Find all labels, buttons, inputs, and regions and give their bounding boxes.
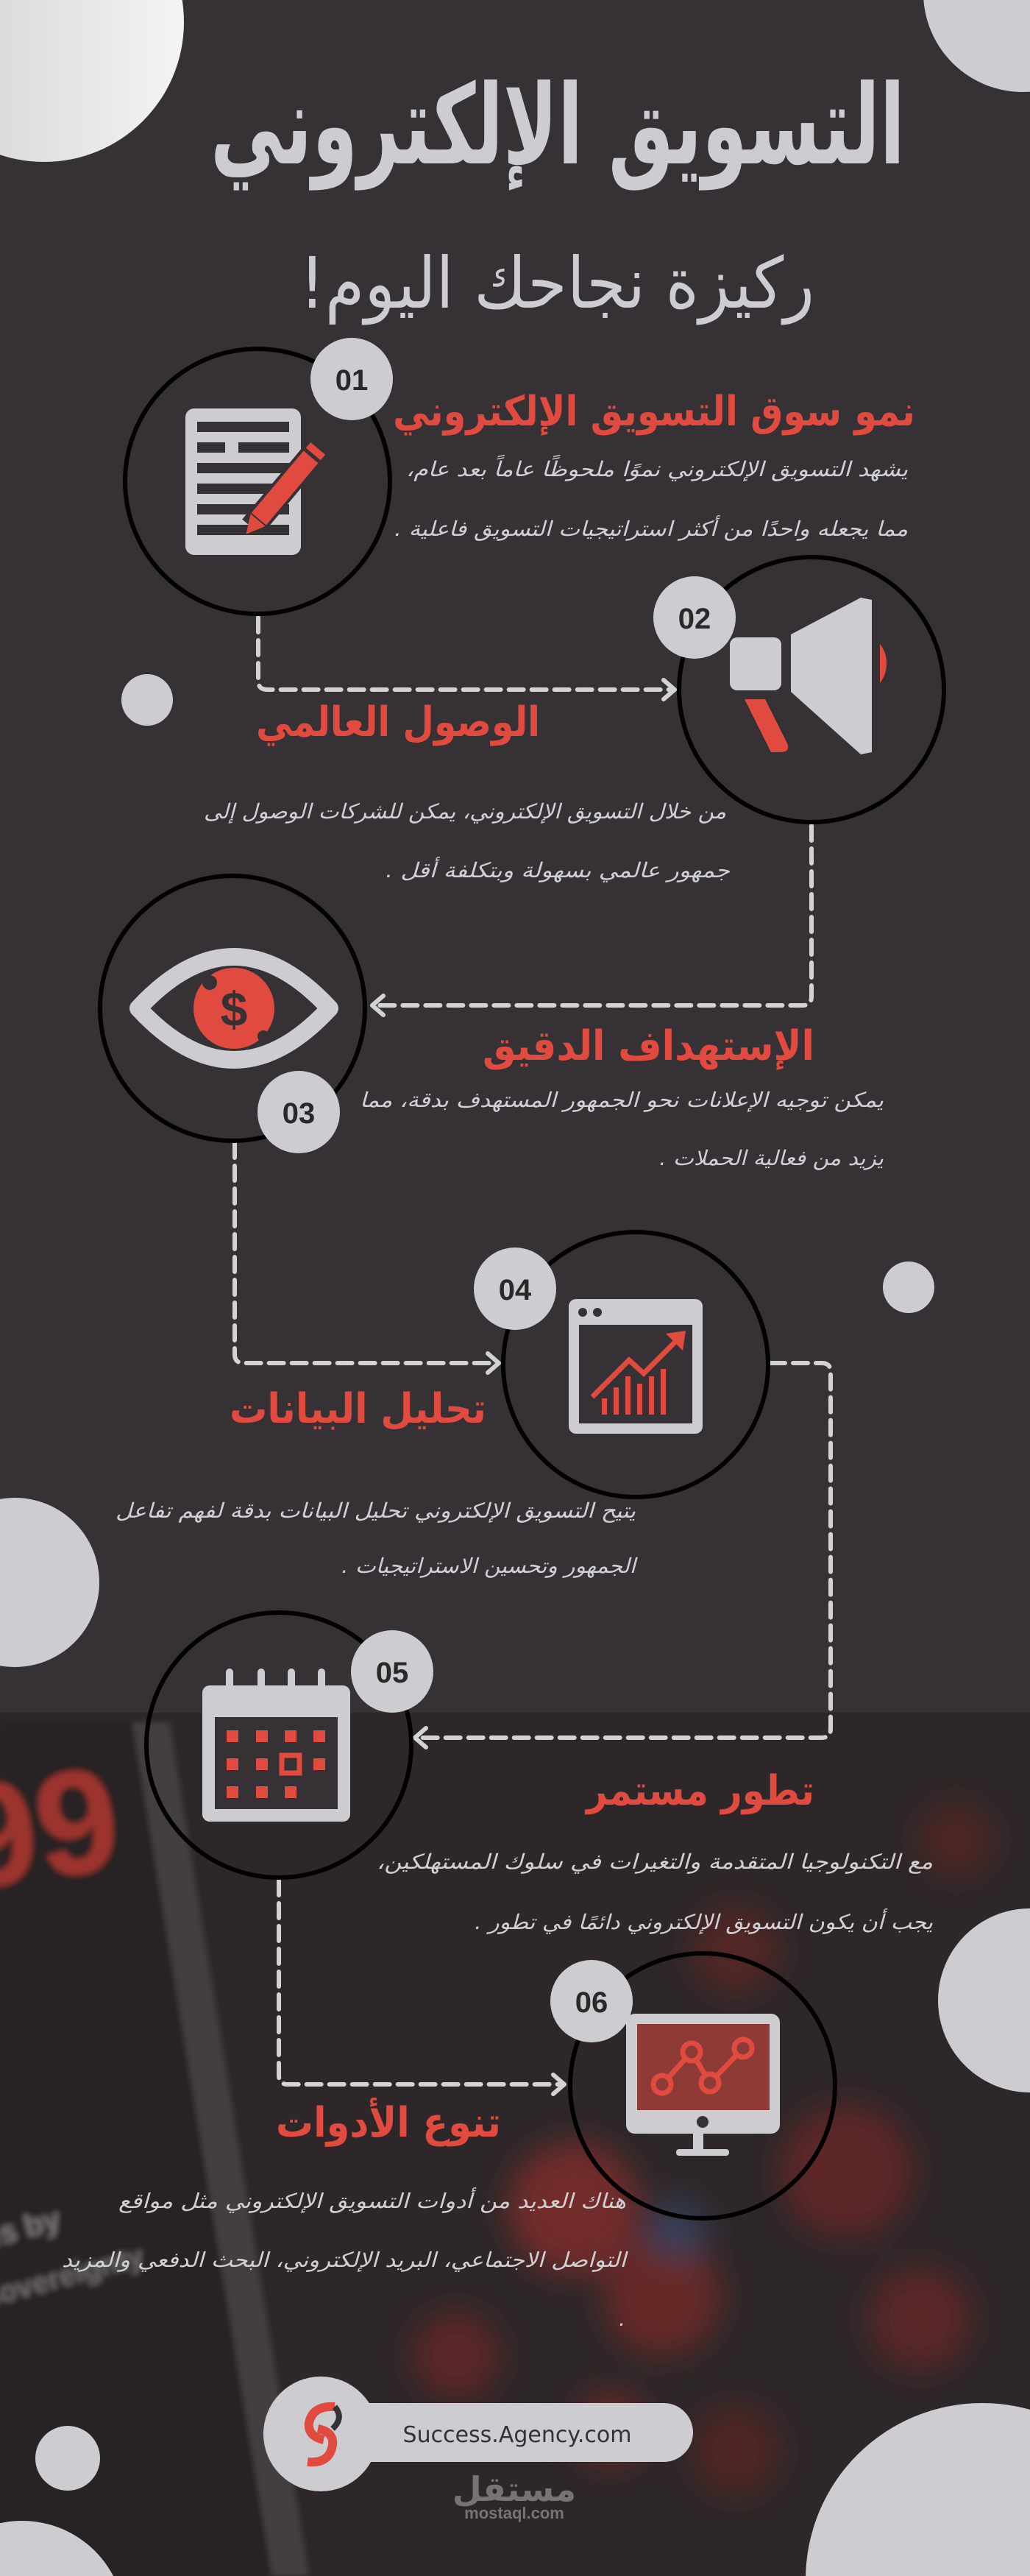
icon: eye with dollar: $ (221, 982, 247, 1036)
step 03: 03 (283, 1097, 315, 1130)
heading 04: تحليل البيانات (230, 1385, 486, 1433)
step 06: 06 (575, 1986, 608, 2019)
body 01 (394, 454, 908, 541)
step 04 (116, 1232, 768, 1578)
body 05: مع التكنولوجيا المتقدمة والتغيرات في سلوك المستهلكين، (377, 1850, 933, 1874)
step 05: 05 (376, 1657, 408, 1689)
icon: link logo (308, 2407, 335, 2462)
footer: website pill (263, 2377, 693, 2491)
badge 04 (474, 1248, 556, 1330)
heading 05: تطور مستمر (584, 1767, 814, 1815)
body 01: مما يجعله واحدًا من أكثر استراتيجيات التسويق فاعلية . (394, 515, 908, 541)
icon: monitor (626, 2014, 780, 2156)
body 02 (204, 799, 731, 882)
step 02 (204, 557, 944, 882)
step 02: 02 (678, 603, 711, 635)
body 02: جمهور عالمي بسهولة وبتكلفة أقل . (386, 857, 731, 882)
icon: calendar (202, 1672, 350, 1822)
step 03 (100, 876, 884, 1170)
dashed connectors (235, 618, 831, 2084)
body 05: يجب أن يكون التسويق الإلكتروني دائمًا في تطور . (475, 1908, 933, 1934)
icon: analytics window (569, 1299, 703, 1434)
badge 03 (258, 1071, 340, 1153)
watermark: mostaql: mostaql.com (464, 2504, 564, 2522)
body 06 (62, 2187, 629, 2331)
body 05 (377, 1850, 933, 1934)
heading 03: الإستهداف الدقيق (483, 1022, 814, 1070)
body 04 (116, 1498, 638, 1578)
step 05 (146, 1613, 933, 1934)
heading 06: تنوع الأدوات (276, 2097, 501, 2147)
body 06: هناك العديد من أدوات التسويق الإلكتروني مثل مواقع (118, 2187, 626, 2213)
body 03: يزيد من فعالية الحملات . (659, 1146, 884, 1170)
icon: megaphone (730, 598, 887, 754)
watermark: mostaql: مستقل (452, 2469, 576, 2509)
body 03: يمكن توجيه الإعلانات نحو الجمهور المستهدف بدقة، مما (360, 1088, 884, 1112)
footer: website pill: Success.Agency.com (403, 2422, 631, 2448)
badge 05 (351, 1630, 433, 1713)
step 06 (62, 1953, 835, 2331)
photo background (0, 1713, 1030, 2576)
body 04: الجمهور وتحسين الاستراتيجيات . (341, 1554, 638, 1578)
body 06: . (619, 2307, 625, 2331)
step 01: 01 (335, 364, 368, 397)
icon: eye with dollar (138, 957, 330, 1060)
body 04: يتيح التسويق الإلكتروني تحليل البيانات بدقة لفهم تفاعل (116, 1498, 636, 1523)
body 01: يشهد التسويق الإلكتروني نموًا ملحوظًا عاماً بعد عام، (406, 454, 908, 481)
subtitle: ركيزة نجاحك اليوم! (299, 242, 814, 325)
body 03 (360, 1088, 884, 1170)
badge 02 (653, 576, 736, 659)
step 04: 04 (499, 1274, 532, 1306)
icon: document with pencil (185, 408, 327, 555)
step 01 (125, 338, 915, 614)
badge 01 (310, 338, 393, 420)
heading 02: الوصول العالمي (256, 698, 540, 746)
arrowheads (372, 680, 675, 2094)
badge 06 (550, 1960, 633, 2042)
body 02: من خلال التسويق الإلكتروني، يمكن للشركات الوصول إلى (204, 799, 726, 824)
heading 01: نمو سوق التسويق الإلكتروني (393, 388, 915, 436)
body 06: التواصل الاجتماعي، البريد الإلكتروني، البحث الدفعي والمزيد (62, 2248, 629, 2272)
